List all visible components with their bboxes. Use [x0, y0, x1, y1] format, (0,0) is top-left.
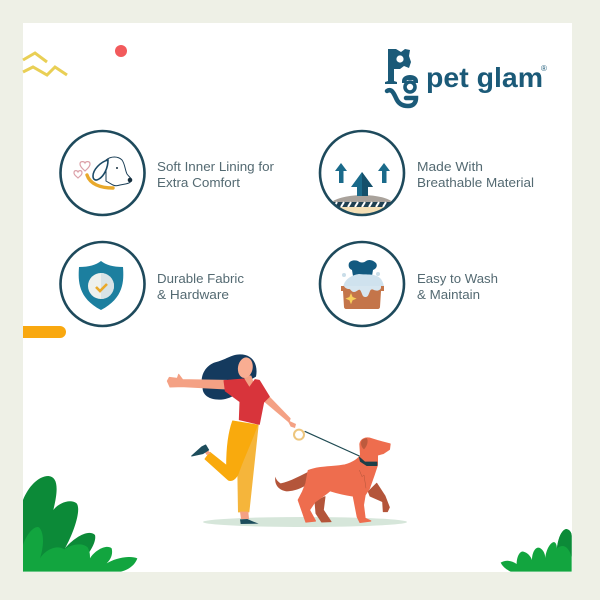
- text: easy to wash: & Maintain: [417, 288, 480, 302]
- neck and face: [243, 375, 255, 388]
- feature: soft inner lining: [60, 131, 274, 215]
- bush left: [23, 476, 137, 572]
- leash ring: [294, 430, 304, 440]
- bush right: [501, 529, 572, 572]
- feature: durable fabric: [60, 242, 244, 326]
- logo monogram: [385, 49, 418, 106]
- front leg pants: [205, 421, 257, 480]
- text: breathable material: Made With: [417, 160, 483, 174]
- collar: [359, 456, 377, 466]
- red dot: [115, 45, 127, 57]
- shoes: [204, 449, 211, 455]
- icon: arrows over fabric: [320, 131, 404, 215]
- text: durable fabric: Durable Fabric: [157, 272, 244, 286]
- dog on leash: [275, 420, 390, 522]
- text: soft inner lining: Soft Inner Lining for: [157, 160, 274, 174]
- right arm: [264, 396, 291, 423]
- icon: shield with check: [60, 242, 144, 326]
- back leg pale: [237, 423, 259, 512]
- hair: [202, 354, 257, 400]
- decorative zigzags: [23, 53, 67, 75]
- leash: [305, 431, 359, 456]
- hand: [287, 420, 296, 428]
- woman walking: [167, 354, 291, 524]
- text: easy to wash: Easy to Wash: [417, 272, 498, 286]
- text: durable fabric: & Hardware: [157, 288, 229, 302]
- registered mark: ®: [541, 64, 547, 73]
- ground shadow: [203, 517, 407, 527]
- text: breathable material: Breathable Material: [417, 176, 534, 190]
- orange pill: [23, 326, 66, 338]
- hearts: [80, 162, 90, 171]
- back dark legs: [368, 483, 389, 512]
- text: soft inner lining: Extra Comfort: [157, 176, 241, 190]
- logo: pet glam: [385, 49, 547, 106]
- icon: wash basin: [320, 242, 404, 326]
- fur lines: [359, 470, 366, 488]
- tail: [275, 470, 313, 491]
- icon: dog with collar: [60, 131, 144, 215]
- shirt: [224, 379, 269, 424]
- body: [298, 438, 390, 522]
- feature: breathable material: [320, 131, 534, 215]
- left arm: [167, 374, 227, 389]
- logo wordmark: pet glam: [426, 62, 543, 93]
- feature: easy to wash: [320, 242, 498, 326]
- ear: [361, 438, 368, 449]
